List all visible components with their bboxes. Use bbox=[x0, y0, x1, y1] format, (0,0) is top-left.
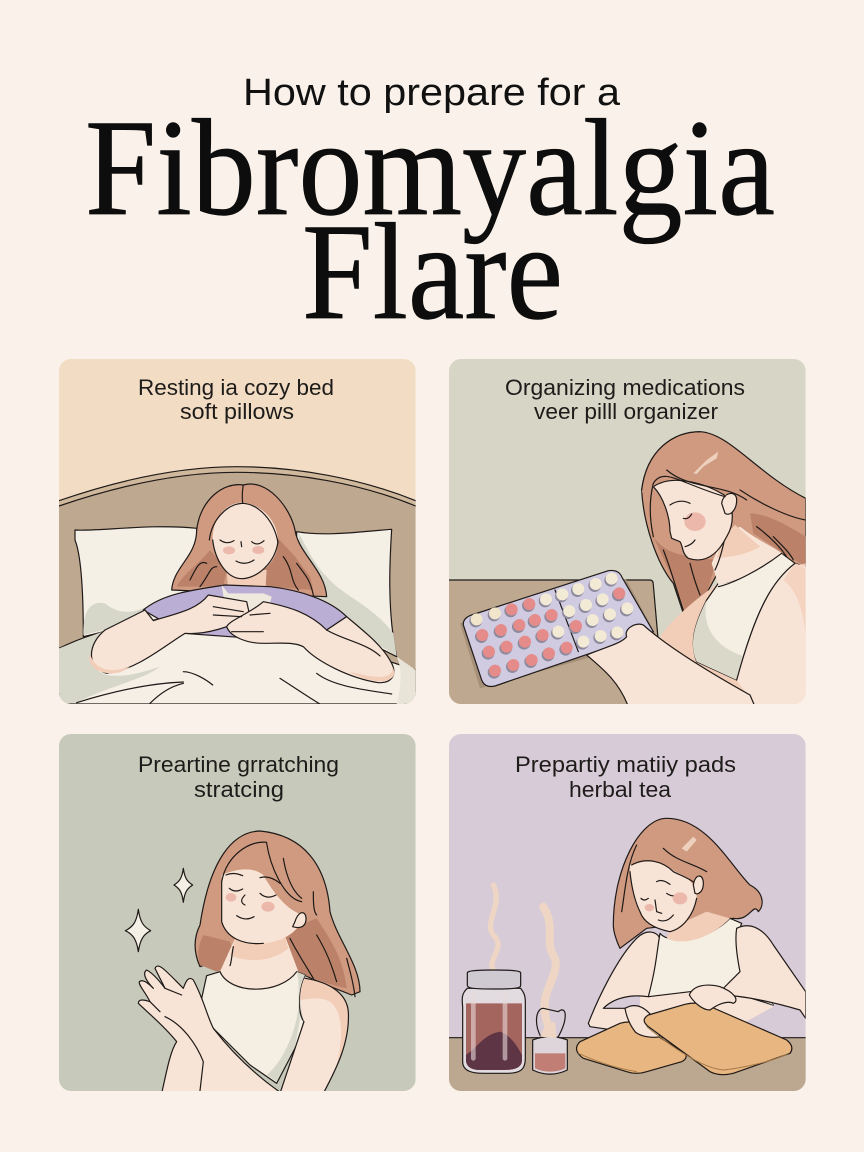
pill tray bbox=[460, 570, 657, 688]
panel 4 illustration bbox=[447, 734, 808, 1093]
panel 4 caption: herbal tea bbox=[569, 777, 672, 802]
small cup bbox=[533, 1008, 567, 1074]
table bbox=[447, 1038, 808, 1093]
blanket bbox=[59, 627, 416, 704]
hair strands bbox=[230, 858, 355, 997]
panel 1 caption bbox=[138, 375, 334, 424]
pillow shade bbox=[83, 603, 153, 635]
arm bbox=[737, 563, 806, 704]
right arm bbox=[717, 926, 806, 1018]
panel 4 caption: Prepartiy matiiy pads bbox=[515, 752, 736, 777]
blanket folds bbox=[77, 607, 392, 704]
pill shadows bbox=[469, 574, 633, 679]
hair highlight bbox=[682, 837, 697, 852]
panel 3 caption: Preartine grratching bbox=[138, 752, 339, 777]
hands and forearm bbox=[138, 966, 282, 1093]
right hand and arm bbox=[227, 602, 394, 683]
panel 3 caption: stratcing bbox=[194, 777, 284, 802]
hair strands bbox=[663, 470, 806, 610]
ear and features bbox=[670, 493, 737, 547]
lavender shirt bbox=[143, 585, 347, 643]
hair back bbox=[642, 432, 806, 613]
hand and forearm bbox=[587, 624, 755, 707]
sparkle small bbox=[174, 868, 193, 902]
panel 3 illustration bbox=[59, 734, 416, 1093]
forearms behind pads bbox=[640, 990, 773, 1025]
body skin bbox=[660, 563, 806, 704]
left arm bbox=[91, 595, 250, 673]
right hand bbox=[689, 985, 736, 1010]
facial features bbox=[641, 876, 703, 921]
steam bbox=[490, 885, 556, 1023]
arm shading bbox=[89, 653, 130, 673]
shirt front bbox=[222, 585, 272, 611]
pills bbox=[471, 573, 633, 677]
hair bbox=[172, 484, 327, 597]
face bbox=[213, 503, 278, 579]
top bbox=[648, 918, 773, 1005]
neck bbox=[226, 570, 267, 586]
panel 1 illustration bbox=[59, 359, 416, 704]
hairline bbox=[642, 432, 725, 537]
face bbox=[630, 861, 697, 932]
right heat pad bbox=[644, 1003, 792, 1075]
top bbox=[202, 972, 305, 1083]
sparkle large bbox=[125, 909, 151, 952]
facial features bbox=[220, 540, 264, 563]
panel: organizing medications bbox=[447, 359, 806, 707]
panel: resting in bed bbox=[59, 359, 416, 704]
left arm bbox=[588, 932, 660, 1037]
hair strands front bbox=[622, 845, 707, 912]
hairline bbox=[209, 503, 278, 543]
top bbox=[693, 553, 795, 680]
ear bbox=[293, 913, 306, 928]
title line: Fibromyalgia: Fibromyalgia bbox=[85, 91, 775, 244]
neck bbox=[667, 912, 730, 941]
table bbox=[447, 580, 664, 707]
headboard bbox=[59, 467, 416, 704]
panel: stretching bbox=[59, 734, 416, 1093]
hair strands bbox=[190, 557, 313, 595]
panel 1 caption: Resting ia cozy bed bbox=[138, 375, 334, 400]
panel 2 caption: veer pilll organizer bbox=[534, 399, 718, 424]
title line: how to prepare: How to prepare for a bbox=[243, 72, 621, 114]
tea jar bbox=[462, 970, 525, 1073]
neck bbox=[712, 527, 783, 584]
face bbox=[222, 869, 303, 944]
hair back bbox=[195, 831, 360, 995]
panel 2 caption bbox=[505, 375, 745, 424]
hair front bbox=[222, 841, 304, 915]
title bbox=[85, 72, 775, 348]
panel 2 caption: Organizing medications bbox=[505, 375, 745, 400]
panel 2 illustration bbox=[447, 359, 806, 707]
hair highlights bbox=[693, 452, 718, 474]
hair front bbox=[642, 444, 726, 496]
left hand bbox=[625, 1006, 660, 1037]
panel: heat pads and herbal tea bbox=[447, 734, 808, 1093]
face bbox=[653, 480, 732, 560]
panel 4 caption bbox=[515, 752, 736, 802]
far arm bbox=[280, 978, 348, 1093]
left heat pad bbox=[577, 1022, 686, 1073]
panel 1 caption: soft pillows bbox=[180, 399, 294, 424]
right pillow bbox=[297, 529, 397, 657]
hair bbox=[613, 818, 762, 948]
hairline bbox=[222, 842, 302, 902]
neck bbox=[220, 932, 298, 989]
left pillow bbox=[75, 527, 197, 637]
panel 3 caption bbox=[138, 752, 339, 802]
facial features bbox=[226, 873, 280, 919]
title line: Flare: Flare bbox=[302, 195, 563, 348]
